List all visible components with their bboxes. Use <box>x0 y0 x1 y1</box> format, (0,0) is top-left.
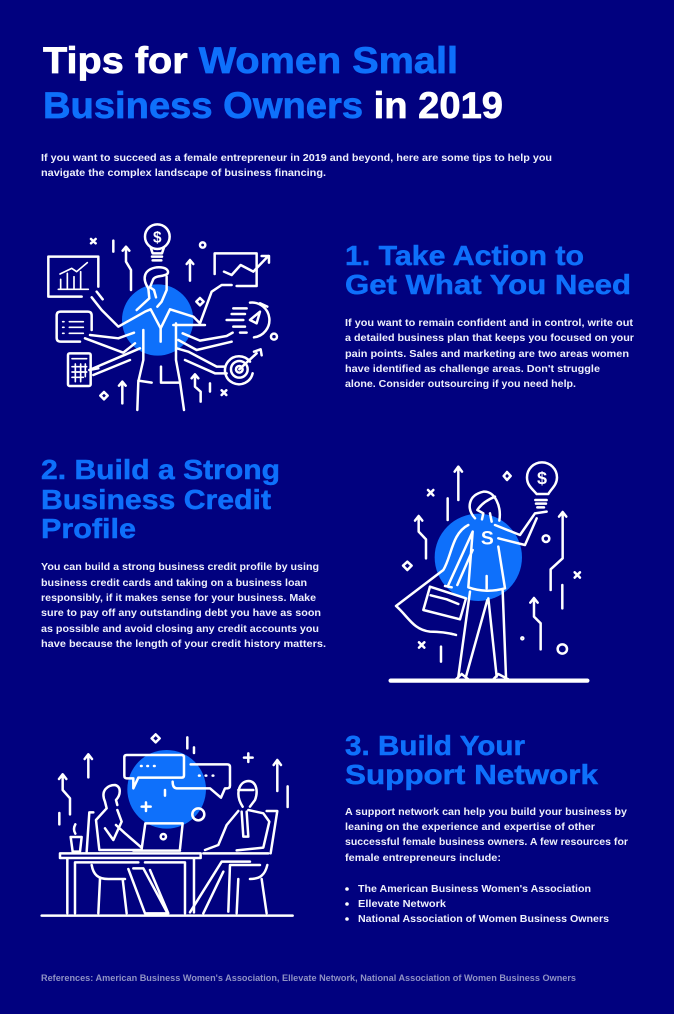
intro text: navigate the complex landscape of business financing. <box>41 167 326 179</box>
illustration: superhero businesswoman: $ <box>537 468 547 488</box>
section 3 text: successful female business owners. A few resources for <box>345 836 628 848</box>
section 3 text: female entrepreneurs include: <box>345 852 501 864</box>
resources list: The American Business Women's Association <box>358 883 591 895</box>
figure: woman with six arms <box>85 267 233 410</box>
section 3 text: leaning on the experience and expertise of other <box>345 821 595 833</box>
title <box>43 40 503 126</box>
section 1 text: have identified as challenge areas. Don't struggle <box>345 363 600 375</box>
section 2 text: as possible and avoid closing any credit accounts you <box>41 623 319 635</box>
section 1 heading: 1. Take Action to <box>345 240 584 271</box>
section 1 heading <box>345 240 631 300</box>
resources list: Ellevate Network <box>358 898 446 910</box>
ground line <box>42 912 293 919</box>
section 2 text: have because the length of your credit history matters. <box>41 638 326 650</box>
icon: dollar light bulb <box>527 462 557 507</box>
icon: stopwatch <box>227 303 269 337</box>
section 2 text: responsibly, if it makes sense for your business. Make <box>41 592 316 604</box>
icon: checklist <box>57 312 92 342</box>
section 2 text <box>41 561 326 650</box>
section 2 heading: Business Credit <box>41 484 271 515</box>
speech bubble right <box>173 764 230 798</box>
illustration: multitasking woman: $ <box>153 229 162 246</box>
section 1 text: pain points. Sales and marketing are two areas women <box>345 348 629 360</box>
section 1 text: alone. Consider outsourcing if you need help. <box>345 378 576 390</box>
decorative arrows and marks <box>403 467 580 662</box>
intro text <box>41 152 552 179</box>
references footer: References: American Business Women's Association, Ellevate Network, National Association of Women Business Owners <box>41 973 576 983</box>
icon: target <box>225 349 262 384</box>
section 3 heading <box>345 730 598 790</box>
decorative arrows and marks <box>59 734 288 824</box>
section 2 text: You can build a strong business credit profile by using <box>41 561 319 573</box>
section 2 text: sure to pay off any outstanding debt you have as soon <box>41 607 321 619</box>
resources list <box>345 883 609 925</box>
figure: man <box>190 781 277 913</box>
table <box>60 853 268 913</box>
icon: trend frame <box>215 253 269 286</box>
laptop <box>133 823 183 851</box>
superhero S emblem: S <box>481 529 494 550</box>
ground line <box>391 674 587 687</box>
section 2 heading: 2. Build a Strong <box>41 454 280 485</box>
section 2 text: business credit cards and taking on a business loan <box>41 577 307 589</box>
figure: woman <box>87 785 168 913</box>
section 1 heading: Get What You Need <box>345 269 631 300</box>
section 1 text: a detailed business plan that keeps you focused on your <box>345 332 634 344</box>
illustration: multitasking woman <box>48 224 277 410</box>
icon: bar chart frame <box>48 257 98 297</box>
intro text: If you want to succeed as a female entrepreneur in 2019 and beyond, here are some tips to help you <box>41 152 552 164</box>
illustration: two people meeting at a table <box>42 734 293 916</box>
section 3 text: A support network can help you build your business by <box>345 806 627 818</box>
coffee cup <box>71 824 82 852</box>
section 2 heading <box>41 454 280 544</box>
section 1 text <box>345 317 634 390</box>
illustration: superhero businesswoman <box>391 462 587 681</box>
title: Tips for Women Small <box>43 40 458 81</box>
section 3 heading: 3. Build Your <box>345 730 525 761</box>
section 3 text <box>345 806 628 864</box>
title: Business Owners in 2019 <box>43 85 503 126</box>
resources list: National Association of Women Business Owners <box>358 913 609 925</box>
section 3 heading: Support Network <box>345 759 598 790</box>
section 1 text: If you want to remain confident and in control, write out <box>345 317 634 329</box>
figure: woman with cape and briefcase <box>396 492 547 679</box>
icon: dollar light bulb <box>145 224 170 260</box>
speech bubble left <box>124 755 184 788</box>
section 2 heading: Profile <box>41 513 136 544</box>
icon: calculator <box>68 353 91 386</box>
decorative arrows and marks <box>91 239 277 403</box>
